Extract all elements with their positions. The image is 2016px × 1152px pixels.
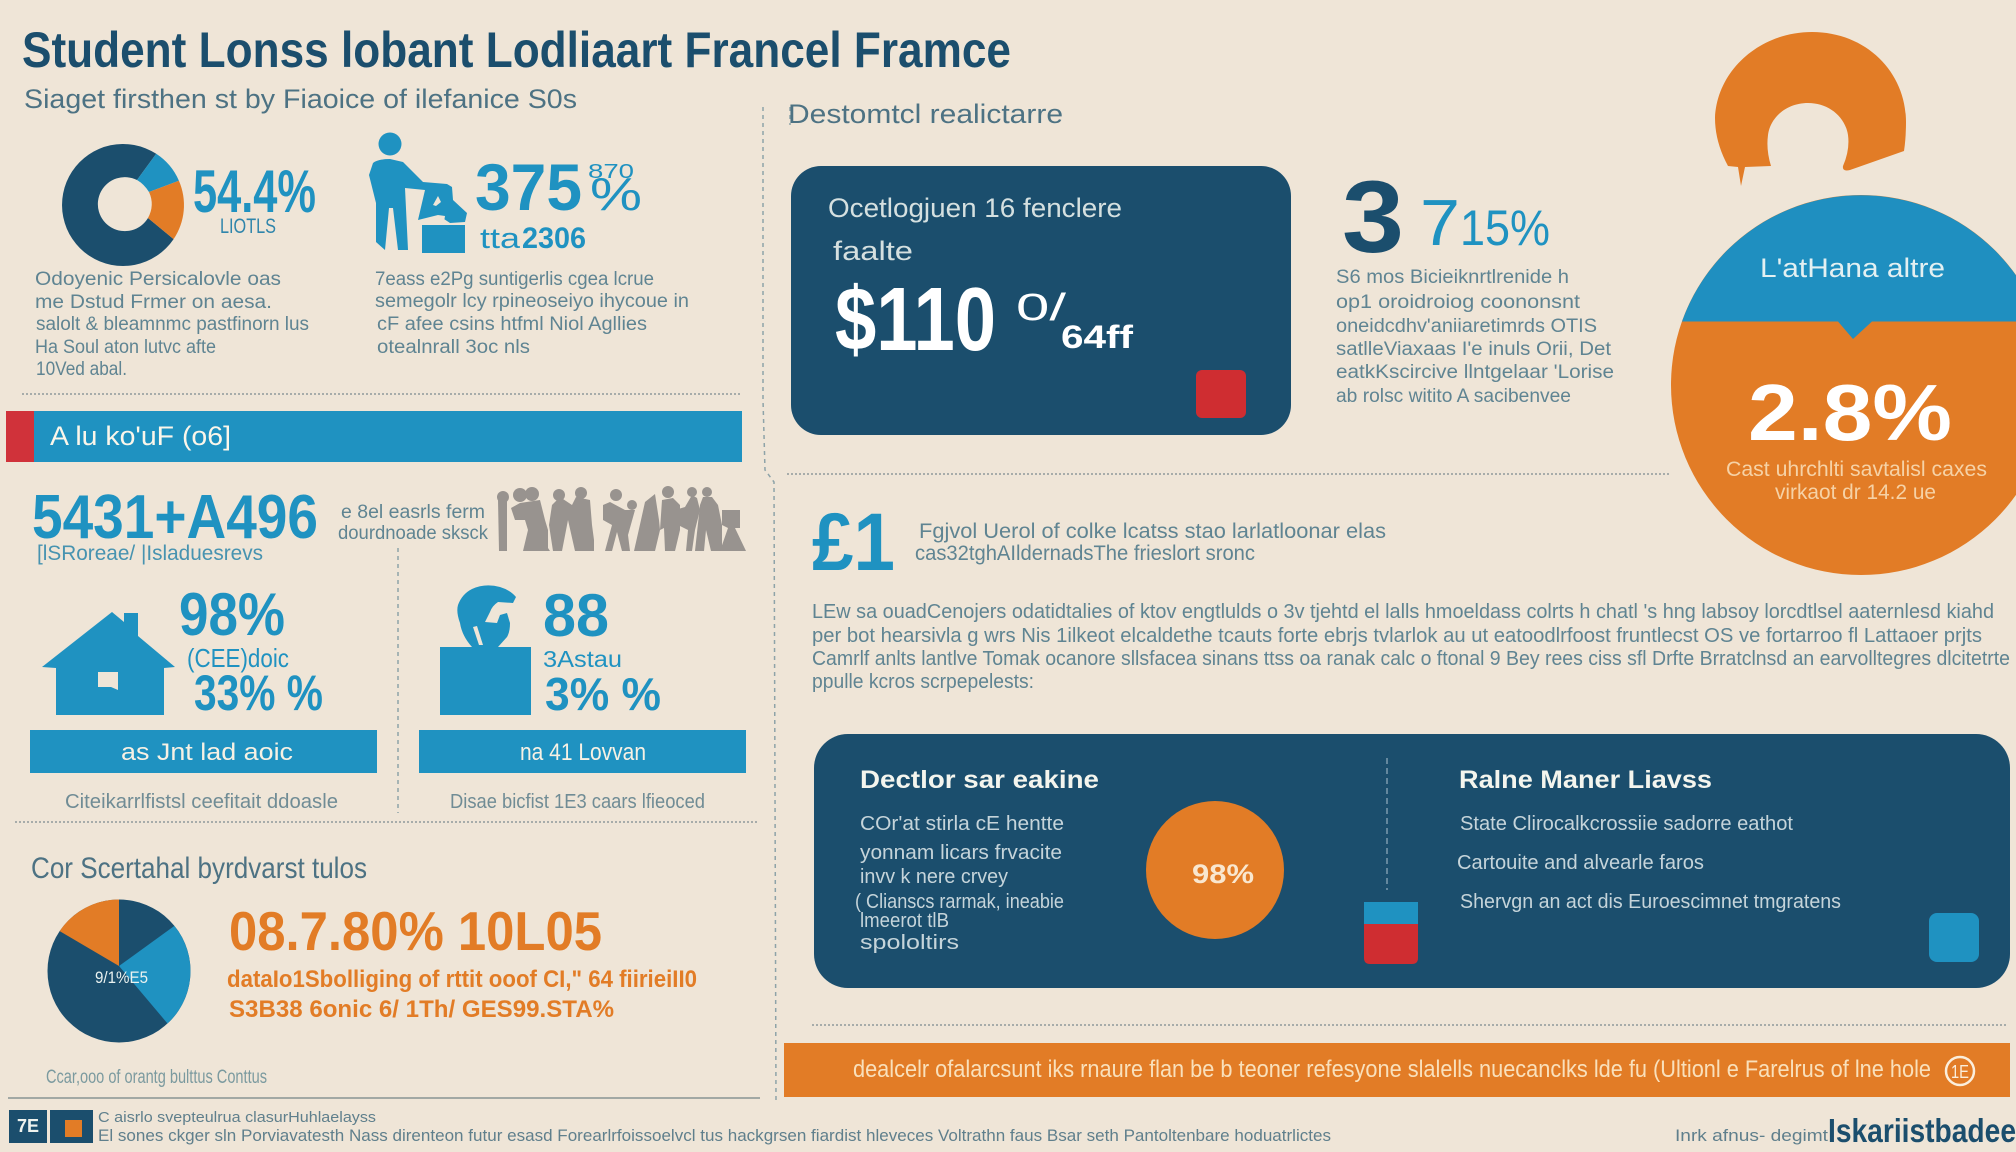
card left list: ( Clianscs rarmak, ineabie [855, 891, 1064, 913]
card amount [835, 270, 1133, 370]
circle description: virkaot dr 14.2 ue [1775, 481, 1936, 504]
icon: crowd silhouettes [497, 486, 746, 551]
card red marker [1196, 370, 1246, 418]
section heading: right: Destomtcl realictarre [788, 99, 1063, 129]
stat description: S6 mos Bicieiknrtlrenide h [1336, 267, 1569, 288]
donut label: LIOTLS [220, 215, 276, 238]
footer right credit [1675, 1112, 2016, 1149]
card heading [828, 193, 1122, 266]
panel: worker stat [419, 582, 746, 813]
circle description [1726, 458, 1987, 504]
pound description: cas32tghAIldernadsThe frieslort sronc [915, 542, 1255, 565]
card left list: invv k nere crvey [860, 866, 1008, 888]
panel: person stat [369, 132, 689, 358]
icon: house [42, 612, 175, 715]
card left list: lmeerot tlB [860, 910, 949, 932]
worker figure: 88 [543, 582, 609, 649]
stat description [1336, 267, 1614, 407]
banner: A lu ko'uF (o6] [50, 421, 231, 451]
icon: circled mark: 1E [1951, 1062, 1969, 1082]
housing bar: as Jnt lad aoic [121, 739, 293, 766]
pound description: Fgjvol Uerol of colke lcatss stao larlatloonar elas [919, 520, 1386, 543]
donut description: salolt & bleamnmc pastfinorn lus [36, 314, 309, 335]
person stat number: 375 [475, 150, 582, 224]
housing figure: 98% [179, 581, 285, 648]
title: Student Lonss lobant Lodliaart Francel Framce [22, 22, 1011, 78]
person description [375, 269, 689, 358]
footer logo blocks [9, 1110, 93, 1143]
subtitle: Siaget firsthen st by Fiaoice of ilefanice S0s [24, 84, 577, 114]
person description: otealnrall 3oc nls [377, 337, 530, 358]
card right list [1457, 813, 1841, 913]
panel: lower left pie [31, 852, 697, 1088]
paragraph: ppulle kcros scrpepelests: [812, 671, 1034, 693]
housing caption: Citeikarrlfistsl ceefitait ddoasle [65, 791, 338, 813]
panel: amount card [791, 166, 1291, 435]
worker label: 3Astau [543, 646, 622, 672]
paragraph: LEw sa ouadCenojers odatidtalies of ktov engtlulds o 3v tjehtd el lalls hmoeldass colrts h chatl 's hng labsoy lorcdtlsel aaternlesd kiahd [812, 601, 1994, 623]
orange callout bar: dealcelr ofalarcsunt iks rnaure flan be b teoner refesyone slalells nuecanclks lde fu (Ultionl e Farelrus of lne hole [853, 1056, 1931, 1083]
orange description: S3B38 6onic 6/ 1Th/ GES99.STA% [229, 996, 614, 1023]
paragraph [812, 601, 2010, 693]
paragraph: per bot hearsivla g wrs Nis 1ilkeot elcaldethe tcauts forte ebrjs tvlarlok au ut eatoodlrfoost fruntlecst OS ve fortarroo fl Lattaoer prjts [812, 625, 1982, 647]
orange description [227, 966, 697, 1023]
pie chart [48, 900, 190, 1042]
housing second figure: 33% % [194, 665, 323, 721]
circle figure: 2.8% [1748, 368, 1952, 457]
person description: 7eass e2Pg suntigerlis cgea lcrue [375, 269, 654, 290]
people description [338, 502, 488, 544]
stat description: ab rolsc witito A sacibenvee [1336, 386, 1571, 407]
card right heading: Ralne Maner Liavss [1459, 766, 1712, 794]
paragraph: Camrlf anlts lantlve Tomak ocanore sllsfacea sinans ttss oa ranak calc o ftonal 9 Bey rees ciss sfl Drfte Brratclnsd an earvolltegres dlcitetrte [812, 648, 2010, 670]
card right list: Shervgn an act dis Euroescimnet tmgratens [1460, 891, 1841, 913]
person description: semegolr lcy rpineoseiyo ihycoue in [375, 291, 689, 312]
donut percentage: 54.4% [193, 158, 316, 225]
orange circle stat [1146, 801, 1284, 939]
panel: 3 715% stat: 7 [1420, 186, 1460, 259]
pie caption: Ccar,ooo of orantg bulttus Conttus [46, 1067, 267, 1088]
panel: 3 715% stat: 15% [1460, 200, 1550, 256]
donut chart [62, 144, 184, 266]
panel: lower dark card [814, 734, 2010, 988]
worker caption: Disae bicfist 1E3 caars lfieoced [450, 791, 705, 813]
footer text: C aisrlo svepteulrua clasurHuhlaelayss [98, 1109, 376, 1126]
person stat number: % [590, 168, 642, 220]
pie chart: 9/1%E5 [95, 968, 148, 987]
big figure caption: [lSRoreae/ |Isladuesrevs [37, 542, 263, 565]
panel: 3 715% stat: 3 [1342, 160, 1404, 274]
card right list: Cartouite and alvearle faros [1457, 852, 1704, 874]
worker bar: na 41 Lovvan [520, 739, 646, 766]
card left list: COr'at stirla cE hentte [860, 813, 1064, 835]
donut description: Odoyenic Persicalovle oas [35, 269, 281, 290]
card amount: 64ff [1061, 319, 1133, 355]
panel: circle stat [1671, 195, 2016, 575]
person stat label: 2306 [522, 222, 586, 255]
footer text [98, 1109, 1331, 1145]
worker bar [419, 730, 746, 773]
panel: pound stat [812, 497, 1386, 588]
panel: 3 715% stat [1336, 160, 1614, 407]
stat description: oneidcdhv'aniiaretimrds OTIS [1336, 316, 1597, 337]
circle description: Cast uhrchlti savtalisl caxes [1726, 458, 1987, 481]
stat description: satlleViaxaas I'e inuls Orii, Det [1336, 339, 1612, 360]
circle heading: L'atHana altre [1760, 253, 1945, 283]
card right list: State Clirocalkcrossiie sadorre eathot [1460, 813, 1793, 835]
panel: donut stat [35, 144, 316, 380]
banner [6, 411, 742, 462]
footer logo blocks: 7E [17, 1116, 39, 1136]
person stat label [480, 222, 586, 255]
blue square marker [1929, 913, 1979, 962]
donut description: me Dstud Frmer on aesa. [35, 292, 272, 313]
card amount: 0/ [1016, 287, 1067, 329]
panel: pound stat: £1 [812, 497, 895, 588]
footer right credit: Inrk afnus- degimt [1675, 1126, 1828, 1145]
footer text: El sones ckger sln Porviavatesth Nass direnteon futur esasd Forearlrfoissoelvcl tus hackgrsen fiardist hleveces Voltrathn faus Bsar seth Pantoltenbare hoduatrlictes [98, 1126, 1331, 1145]
stat description: eatkKscircive llntgelaar 'Lorise [1336, 362, 1614, 383]
person stat number: 870 [588, 161, 634, 183]
small color block [1364, 902, 1418, 964]
donut description: 10Ved abal. [36, 359, 127, 380]
big figure: 5431+A496 [32, 483, 318, 552]
icon: person with box [369, 132, 467, 253]
person description: cF afee csins htfml Niol Agllies [377, 314, 647, 335]
person stat number [475, 150, 642, 224]
icon: orange arch [1715, 32, 1906, 186]
stat description: op1 oroidroiog coononsnt [1336, 292, 1581, 313]
donut description: Ha Soul aton lutvc afte [35, 337, 216, 358]
card left list: spololtirs [860, 932, 959, 954]
icon: circled mark [1946, 1057, 1974, 1085]
housing bar [30, 730, 377, 773]
people description: e 8el easrls ferm [341, 502, 485, 523]
people description: dourdnoade sksck [338, 523, 488, 544]
orange figure: 08.7.80% 10L05 [229, 900, 602, 962]
card heading: faalte [833, 236, 913, 266]
card left list [855, 813, 1064, 954]
person stat label: tta [480, 223, 521, 255]
worker second figure: 3% % [545, 668, 661, 720]
orange circle stat: 98% [1192, 859, 1254, 889]
panel: housing stat [30, 581, 377, 813]
orange callout bar [784, 1043, 2010, 1097]
orange description: dataIo1Sbolliging of rttit ooof CI," 64 fiirieiII0 [227, 966, 697, 993]
housing label: (CEE)doic [187, 643, 289, 673]
card left heading: Dectlor sar eakine [860, 766, 1099, 794]
donut description [35, 269, 309, 380]
icon: figure on block [440, 585, 531, 715]
card left list: yonnam licars frvacite [860, 842, 1062, 864]
card amount: $110 [835, 270, 996, 370]
pound description [915, 520, 1386, 565]
section heading: Cor Scertahal byrdvarst tulos [31, 852, 367, 885]
card heading: Ocetlogjuen 16 fenclere [828, 193, 1122, 223]
